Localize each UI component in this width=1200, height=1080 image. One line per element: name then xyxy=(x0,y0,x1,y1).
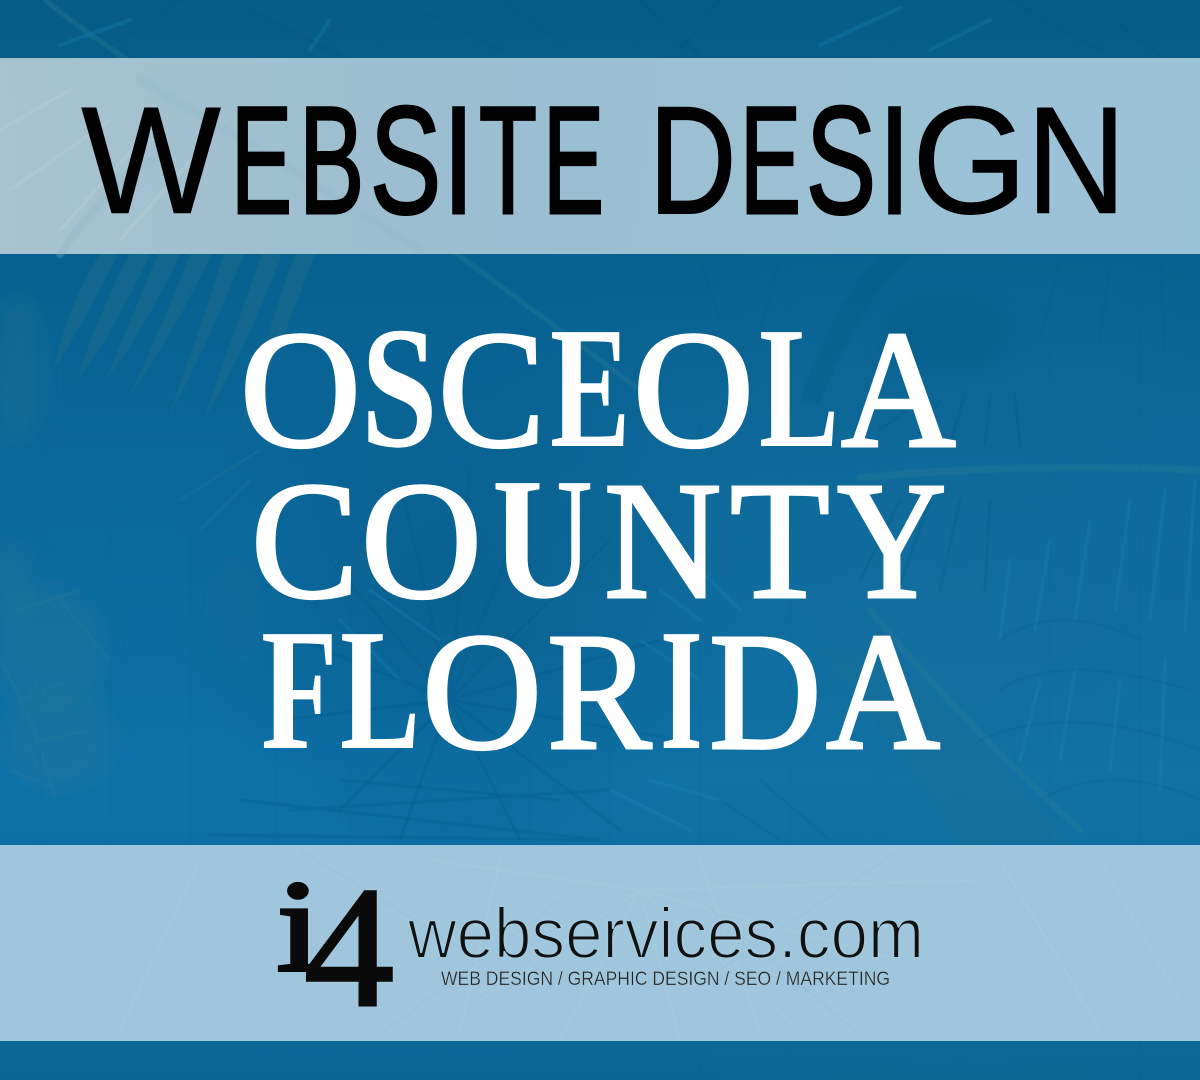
heading line: OSCEOLA: S xyxy=(361,291,438,484)
title: WEBSITE DESIGN: S xyxy=(806,74,876,246)
heading line: COUNTY: Y xyxy=(837,448,947,634)
heading line: COUNTY: N xyxy=(604,448,722,634)
logo mark: i4: 4 xyxy=(304,853,394,1043)
heading line: OSCEOLA: O xyxy=(633,297,754,483)
title: WEBSITE DESIGN: E xyxy=(230,74,292,246)
heading line: OSCEOLA: A xyxy=(841,297,956,483)
title: WEBSITE DESIGN: I xyxy=(443,74,475,246)
heading line: COUNTY: C xyxy=(251,448,359,634)
logo mark: i4: i xyxy=(277,855,321,999)
title: WEBSITE DESIGN: I xyxy=(879,74,910,246)
wordmark: webservices.com: webservices.com xyxy=(407,895,924,974)
heading line: FLORIDA: L xyxy=(340,593,420,786)
heading line: FLORIDA: I xyxy=(660,593,703,786)
top band xyxy=(0,58,1200,254)
heading line: FLORIDA: F xyxy=(261,593,338,786)
heading line: COUNTY: T xyxy=(730,448,829,634)
heading line: COUNTY: U xyxy=(492,442,593,635)
title: WEBSITE DESIGN xyxy=(81,74,1127,246)
title: WEBSITE DESIGN: T xyxy=(479,74,537,246)
heading line: OSCEOLA: O xyxy=(240,297,361,483)
heading line: COUNTY xyxy=(251,442,947,635)
heading line: FLORIDA: O xyxy=(422,599,542,785)
heading line: FLORIDA xyxy=(261,593,940,786)
heading line: FLORIDA: A xyxy=(826,599,940,785)
title: WEBSITE DESIGN: E xyxy=(543,74,605,246)
heading line: OSCEOLA: L xyxy=(759,291,839,484)
logo: i4 webservices.com xyxy=(277,853,924,1043)
tagline: WEB DESIGN / GRAPHIC DESIGN / SEO / MARKETING xyxy=(441,969,890,990)
title: WEBSITE DESIGN: S xyxy=(370,74,441,246)
heading line: OSCEOLA: C xyxy=(438,297,545,483)
heading line: COUNTY: O xyxy=(361,448,482,634)
heading line: OSCEOLA: E xyxy=(550,291,631,484)
title: WEBSITE DESIGN: W xyxy=(81,74,221,246)
title: WEBSITE DESIGN: D xyxy=(649,74,736,246)
title: WEBSITE DESIGN: N xyxy=(1026,74,1127,246)
bottom band xyxy=(0,845,1200,1041)
title: WEBSITE DESIGN: B xyxy=(299,74,364,246)
heading line: FLORIDA: R xyxy=(547,599,652,785)
title: WEBSITE DESIGN: G xyxy=(912,74,1027,246)
heading line: OSCEOLA xyxy=(240,291,956,484)
title: WEBSITE DESIGN: E xyxy=(740,74,801,246)
heading line: FLORIDA: D xyxy=(709,599,821,785)
